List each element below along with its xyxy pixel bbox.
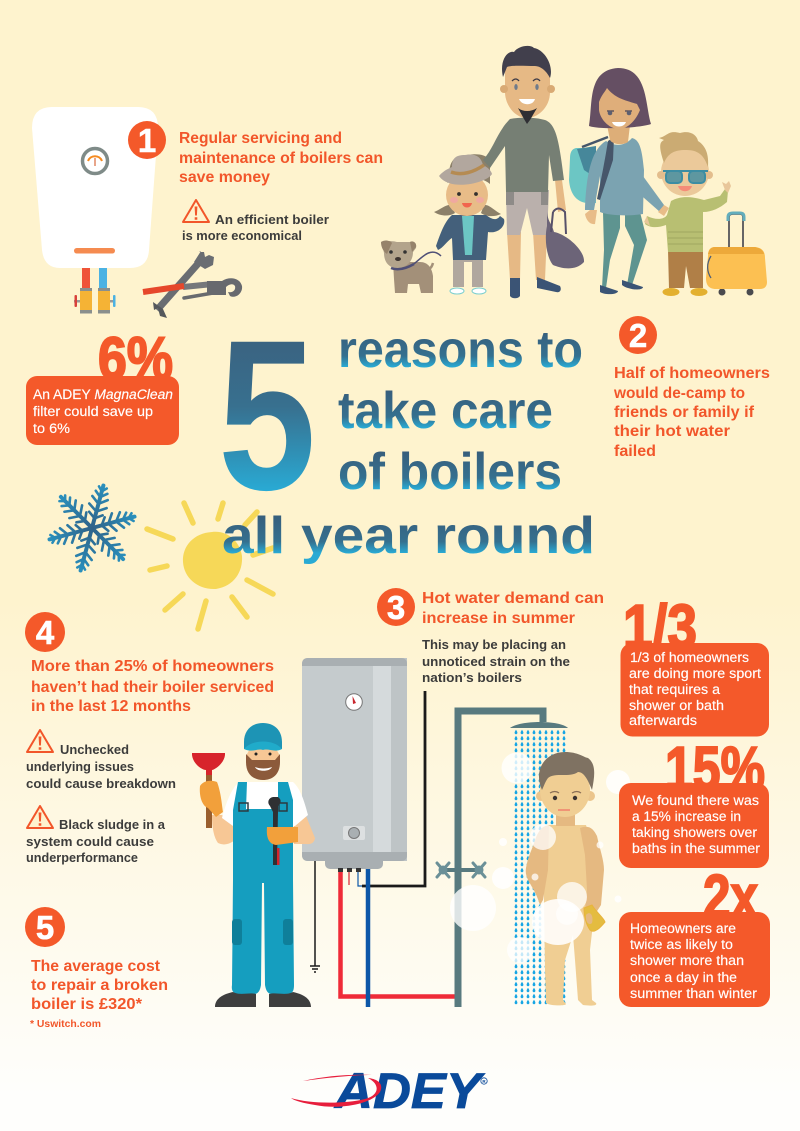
note: black sludge: Black sludge in a	[59, 817, 166, 832]
heading: reason 1: Regular servicing and	[179, 130, 342, 147]
note: efficient boiler	[182, 212, 329, 243]
illustration: man with bag	[483, 46, 584, 298]
callout: 6% saving: filter could save up	[33, 404, 153, 419]
text: reason 4: haven’t had their boiler serviced	[31, 679, 274, 696]
title: 5 reasons to take care of boilers all year round: all year round	[222, 507, 595, 565]
text: reason 4: More than 25% of homeowners	[31, 658, 274, 675]
callout: 1/3 of homeowners: 1/3	[623, 593, 697, 662]
callout: 15% increase: 15%	[665, 735, 765, 804]
number badge 2	[619, 316, 657, 354]
icon: snowflake	[47, 483, 137, 573]
text: reason 2: their hot water	[614, 423, 730, 440]
callout: 1/3 of homeowners: are doing more sport	[629, 666, 761, 681]
note: unchecked issues: Unchecked	[60, 742, 129, 757]
number badge 4	[25, 612, 65, 652]
number badge 4: 4	[36, 614, 55, 651]
callout: 2x as likely: 2x	[703, 863, 758, 932]
callout: 15% increase: We found there was	[632, 793, 759, 808]
text: reason 4	[31, 658, 274, 715]
callout: 6% saving: An ADEY MagnaClean	[33, 387, 173, 402]
heading: reason 1	[179, 130, 383, 186]
title: 5 reasons to take care of boilers all year round: of boilers	[338, 443, 562, 501]
wiring and pipes	[310, 691, 459, 1007]
callout: 1/3 of homeowners: afterwards	[629, 713, 697, 728]
text: reason 4: in the last 12 months	[31, 698, 191, 715]
illustration: shower pipe, head and valves	[437, 711, 568, 1007]
text: reason 5: The average cost	[31, 958, 160, 975]
text: reason 2: Half of homeowners	[614, 365, 770, 382]
note: black sludge: system could cause	[26, 834, 154, 849]
illustration: boy with sunglasses	[644, 132, 731, 296]
note: black sludge	[26, 817, 166, 865]
callout: 2x as likely: twice as likely to	[630, 937, 733, 952]
text: reason 3: Hot water demand can	[422, 590, 604, 607]
heading: reason 1: save money	[179, 169, 270, 186]
icon: warning triangle	[27, 806, 53, 828]
text: reason 2	[613, 365, 770, 460]
illustration: dog on a lead	[381, 240, 441, 293]
note: unchecked issues: underlying issues	[26, 759, 134, 774]
text: reason 3: unnoticed strain on the	[422, 654, 570, 669]
callout: 15% increase: baths in the summer	[632, 841, 761, 856]
text: reason 2: would de-camp to	[613, 385, 745, 402]
text: reason 3	[422, 590, 604, 685]
text: reason 5: * Uswitch.com	[30, 1018, 101, 1030]
illustration: grey hot water cylinder	[302, 658, 407, 872]
illustration: plumber with plunger and wrench	[192, 723, 315, 1007]
callout: 1/3 of homeowners: that requires a	[629, 682, 721, 697]
illustration: woman with backpack	[569, 68, 669, 294]
icon: sun	[147, 503, 273, 629]
callout: 2x as likely: Homeowners are	[630, 921, 736, 936]
icon: warning triangle	[183, 200, 209, 222]
number badge 5	[25, 907, 65, 947]
illustration: yellow suitcase	[706, 213, 767, 296]
number badge 2: 2	[629, 317, 647, 354]
note: unchecked issues: could cause breakdown	[26, 776, 176, 791]
callout: 15% increase: a 15% increase in	[632, 809, 741, 824]
icon: warning triangle	[27, 730, 53, 752]
callout: 1/3 of homeowners	[620, 593, 769, 736]
note: unchecked issues	[26, 742, 176, 791]
callout: 1/3 of homeowners: shower or bath	[629, 698, 724, 713]
logo: ADEY: ADEY	[333, 1063, 486, 1119]
callout: 2x as likely: once a day in the	[630, 970, 737, 985]
callout: 15% increase: taking showers over	[632, 825, 758, 840]
logo: ADEY: R	[482, 1079, 486, 1084]
text: reason 2: failed	[614, 443, 656, 460]
bubbles	[450, 752, 630, 963]
callout: 2x as likely	[619, 863, 770, 1007]
callout: 6% saving	[26, 325, 179, 445]
number badge 3: 3	[387, 589, 405, 626]
title: 5 reasons to take care of boilers all year round: reasons to	[338, 321, 583, 379]
callout: 6% saving: 6%	[98, 325, 173, 392]
title: 5 reasons to take care of boilers all year round: take care	[338, 382, 553, 440]
number badge 1: 1	[138, 122, 156, 159]
callout: 15% increase	[619, 735, 769, 868]
illustration: girl with hat	[434, 154, 504, 294]
text: reason 5	[30, 958, 168, 1030]
text: reason 3: This may be placing an	[422, 637, 566, 652]
text: reason 5: boiler is £320*	[31, 996, 143, 1013]
text: reason 3: increase in summer	[422, 610, 575, 627]
note: efficient boiler: An efficient boiler	[215, 212, 329, 227]
note: black sludge: underperformance	[26, 850, 138, 865]
title: 5 reasons to take care of boilers all year round: 5	[218, 296, 316, 535]
callout: 2x as likely: shower more than	[630, 953, 744, 968]
heading: reason 1: maintenance of boilers can	[179, 150, 383, 167]
callout: 6% saving: to 6%	[33, 421, 70, 436]
callout: 2x as likely: summer than winter	[630, 986, 758, 1001]
text: reason 5: to repair a broken	[31, 977, 168, 994]
number badge 1	[128, 121, 166, 159]
text: reason 3: nation’s boilers	[422, 670, 522, 685]
title: 5 reasons to take care of boilers all year round	[218, 296, 595, 565]
text: reason 2: friends or family if	[614, 404, 755, 421]
icon: crossed wrenches	[143, 251, 242, 318]
illustration: boy in the shower	[526, 752, 605, 1006]
number badge 3	[377, 588, 415, 626]
note: efficient boiler: is more economical	[182, 228, 302, 243]
illustration: white wall boiler with pipes	[32, 107, 158, 314]
callout: 1/3 of homeowners: 1/3 of homeowners	[630, 650, 749, 665]
number badge 5: 5	[36, 909, 54, 946]
illustration: falling water droplets	[513, 729, 567, 1005]
